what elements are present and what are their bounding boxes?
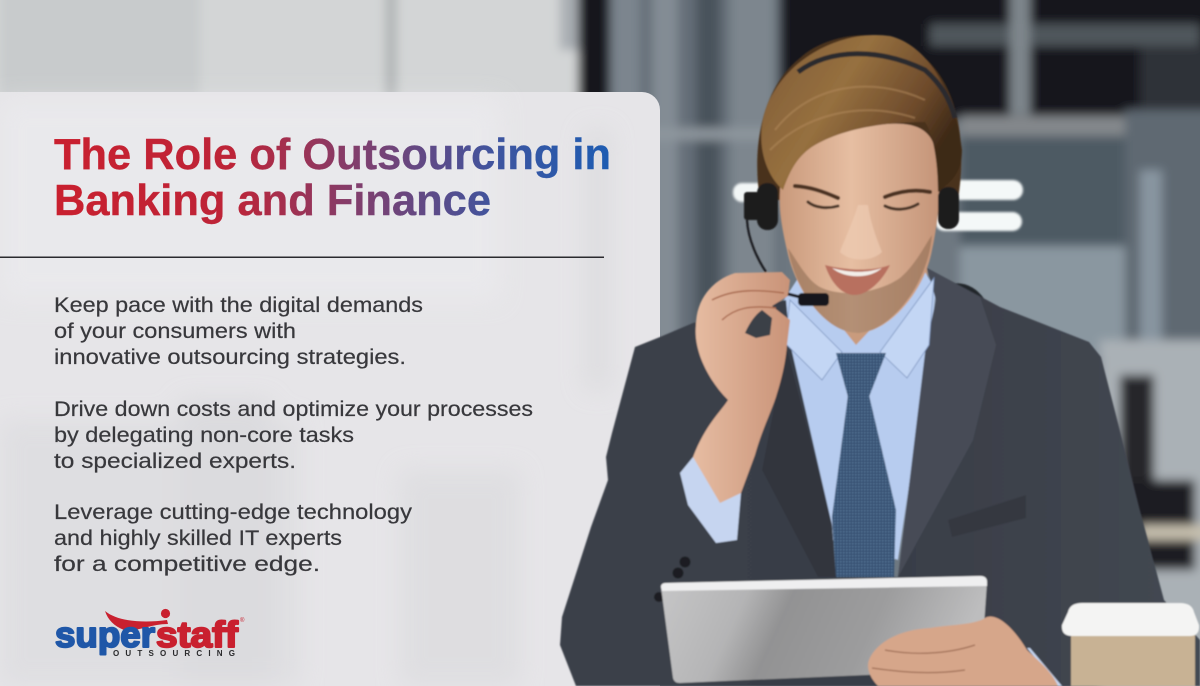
logo registered mark: ® [240,617,245,624]
jacket lapel, right [898,268,996,577]
buttons [654,556,690,602]
shirt [784,272,936,560]
title [54,130,611,225]
jacket pocket [948,495,1026,537]
logo tagline: OUTSOURCING [113,649,235,658]
headset band [798,54,955,118]
jacket lapel, left [762,345,836,577]
head: hair back [757,35,961,200]
eyes [808,202,918,209]
shirt collar [785,278,934,380]
paragraph: costs and processes: Drive down costs and optimize your processes [54,398,533,421]
paragraph: digital demands: innovative outsourcing strategies. [54,346,406,369]
logo dot [161,609,170,618]
paragraph: technology: and highly skilled IT experts [54,527,342,550]
title: Banking and Finance [54,176,491,225]
logo: superstaff outsourcing [55,609,245,658]
gap between fingers and thumb [745,310,772,338]
headset microphone [747,220,829,306]
paragraph: technology: Leverage cutting-edge technology [54,501,413,524]
paragraph: costs and processes: to specialized experts. [54,450,296,473]
photo: man with headset [560,35,1200,686]
logo swoosh [105,611,168,630]
body text [54,294,533,576]
eyebrows [795,186,930,198]
finger lines on lower hand [872,645,975,673]
paragraph: technology: for a competitive edge. [54,553,320,576]
head: hair front [761,35,962,192]
jacket [560,268,1200,686]
nose highlight [840,205,882,260]
cup lid [1062,603,1199,636]
panel: translucent text card [0,92,660,686]
hand holding tablet [868,617,1058,686]
headset ear cup, left [744,183,778,230]
necktie [832,353,896,577]
divider rule [0,256,604,258]
raised forearm and hand [693,272,790,503]
logo wordmark: staff [156,614,239,655]
cup body [1071,634,1195,686]
paragraph: digital demands: of your consumers with [54,320,296,343]
title: The Role of Outsourcing in [54,130,611,179]
tablet [661,576,987,683]
mouth [825,265,890,295]
paragraph: digital demands: Keep pace with the digital demands [54,294,423,317]
ceiling lights [733,180,1023,231]
beard stubble [788,235,932,333]
hair highlights [770,87,925,150]
chair behind shoulder [945,283,985,312]
finger lines [712,291,784,320]
head: face [780,124,939,333]
neck [800,250,930,352]
cuff [680,457,741,543]
paragraph: costs and processes: by delegating non-core tasks [54,424,354,447]
headset ear cup, right [938,187,959,229]
logo wordmark [55,614,239,655]
logo wordmark: super [55,614,155,655]
cuff on lower wrist [1027,648,1062,686]
coffee cup [1062,603,1199,686]
